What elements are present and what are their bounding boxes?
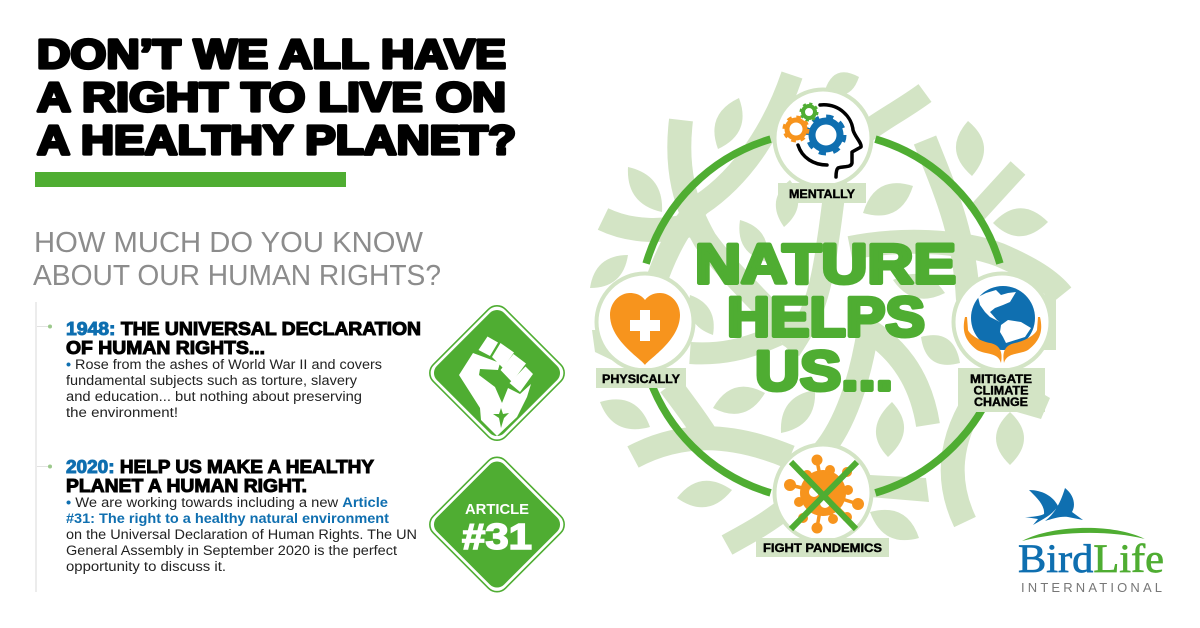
- green title bar: [35, 172, 346, 187]
- title: [37, 31, 516, 163]
- label: physically: PHYSICALLY: [602, 372, 680, 386]
- icon: fist diamond: [425, 301, 569, 445]
- label: mitigate climate change: [958, 368, 1045, 412]
- international: INTERNATIONAL: [1021, 580, 1162, 595]
- green swoosh: [1022, 528, 1145, 541]
- subheading: ABOUT OUR HUMAN RIGHTS?: [33, 260, 441, 292]
- title: A HEALTHY PLANET?: [37, 117, 516, 163]
- text block: 1948: • Rose from the ashes of World War II and covers: [66, 357, 382, 372]
- label: mitigate climate change: MITIGATE: [970, 372, 1032, 386]
- central heading: US...: [755, 339, 893, 402]
- text block: 1948: fundamental subjects such as torture, slavery: [66, 373, 357, 388]
- text block: 2020: [66, 457, 417, 574]
- text block: 2020: #31: The right to a healthy natural environment: [66, 511, 390, 526]
- icon: crossed virus: [784, 454, 864, 534]
- text block: 2020: 2020: HELP US MAKE A HEALTHY: [66, 457, 374, 477]
- icon: globe in hands: [964, 286, 1041, 363]
- text block: 2020: opportunity to discuss it.: [66, 559, 226, 574]
- subheading: HOW MUCH DO YOU KNOW: [34, 227, 424, 259]
- node: fight pandemics: [756, 444, 889, 557]
- label: mitigate climate change: CLIMATE: [974, 384, 1028, 398]
- text block: 1948: 1948: THE UNIVERSAL DECLARATION: [66, 319, 421, 339]
- text block: 2020: General Assembly in September 2020 is the perfect: [66, 543, 397, 558]
- text block: 1948: and education... but nothing about preserving: [66, 389, 362, 404]
- node: physically: [596, 274, 694, 388]
- label: mitigate climate change: CHANGE: [974, 395, 1028, 409]
- icon: bird: [1025, 488, 1083, 525]
- title: DON’T WE ALL HAVE: [37, 31, 506, 77]
- central heading: NATURE: [695, 232, 956, 295]
- title: A RIGHT TO LIVE ON: [37, 74, 506, 120]
- subheading: [33, 227, 441, 292]
- label: mentally: MENTALLY: [789, 187, 855, 201]
- BirdLife logo: [1018, 488, 1164, 595]
- background tree: [590, 72, 1062, 545]
- icon: heart with cross: [610, 293, 680, 365]
- icon: head with gears: [784, 104, 861, 177]
- text block: 2020: on the Universal Declaration of Human Rights. The UN: [66, 527, 417, 542]
- text block: 1948: [66, 319, 421, 420]
- label: fight pandemics: FIGHT PANDEMICS: [763, 541, 882, 555]
- green ring: [646, 139, 1000, 493]
- icon: article 31 diamond: [425, 452, 569, 597]
- timeline: [35, 302, 52, 592]
- text block: 1948: OF HUMAN RIGHTS...: [66, 338, 265, 358]
- node: mitigate climate change: [954, 274, 1050, 412]
- text block: 1948: the environment!: [66, 405, 178, 420]
- wordmark: BirdLife: [1018, 536, 1164, 581]
- text block: 2020: • We are working towards including a new Article: [66, 495, 389, 510]
- text block: 2020: PLANET A HUMAN RIGHT.: [66, 476, 307, 496]
- node: mentally: [774, 90, 872, 203]
- icon: article 31 diamond: #31: [462, 516, 532, 557]
- central heading: [695, 232, 956, 402]
- icon: article 31 diamond: ARTICLE: [465, 501, 529, 518]
- central heading: HELPS: [727, 285, 925, 348]
